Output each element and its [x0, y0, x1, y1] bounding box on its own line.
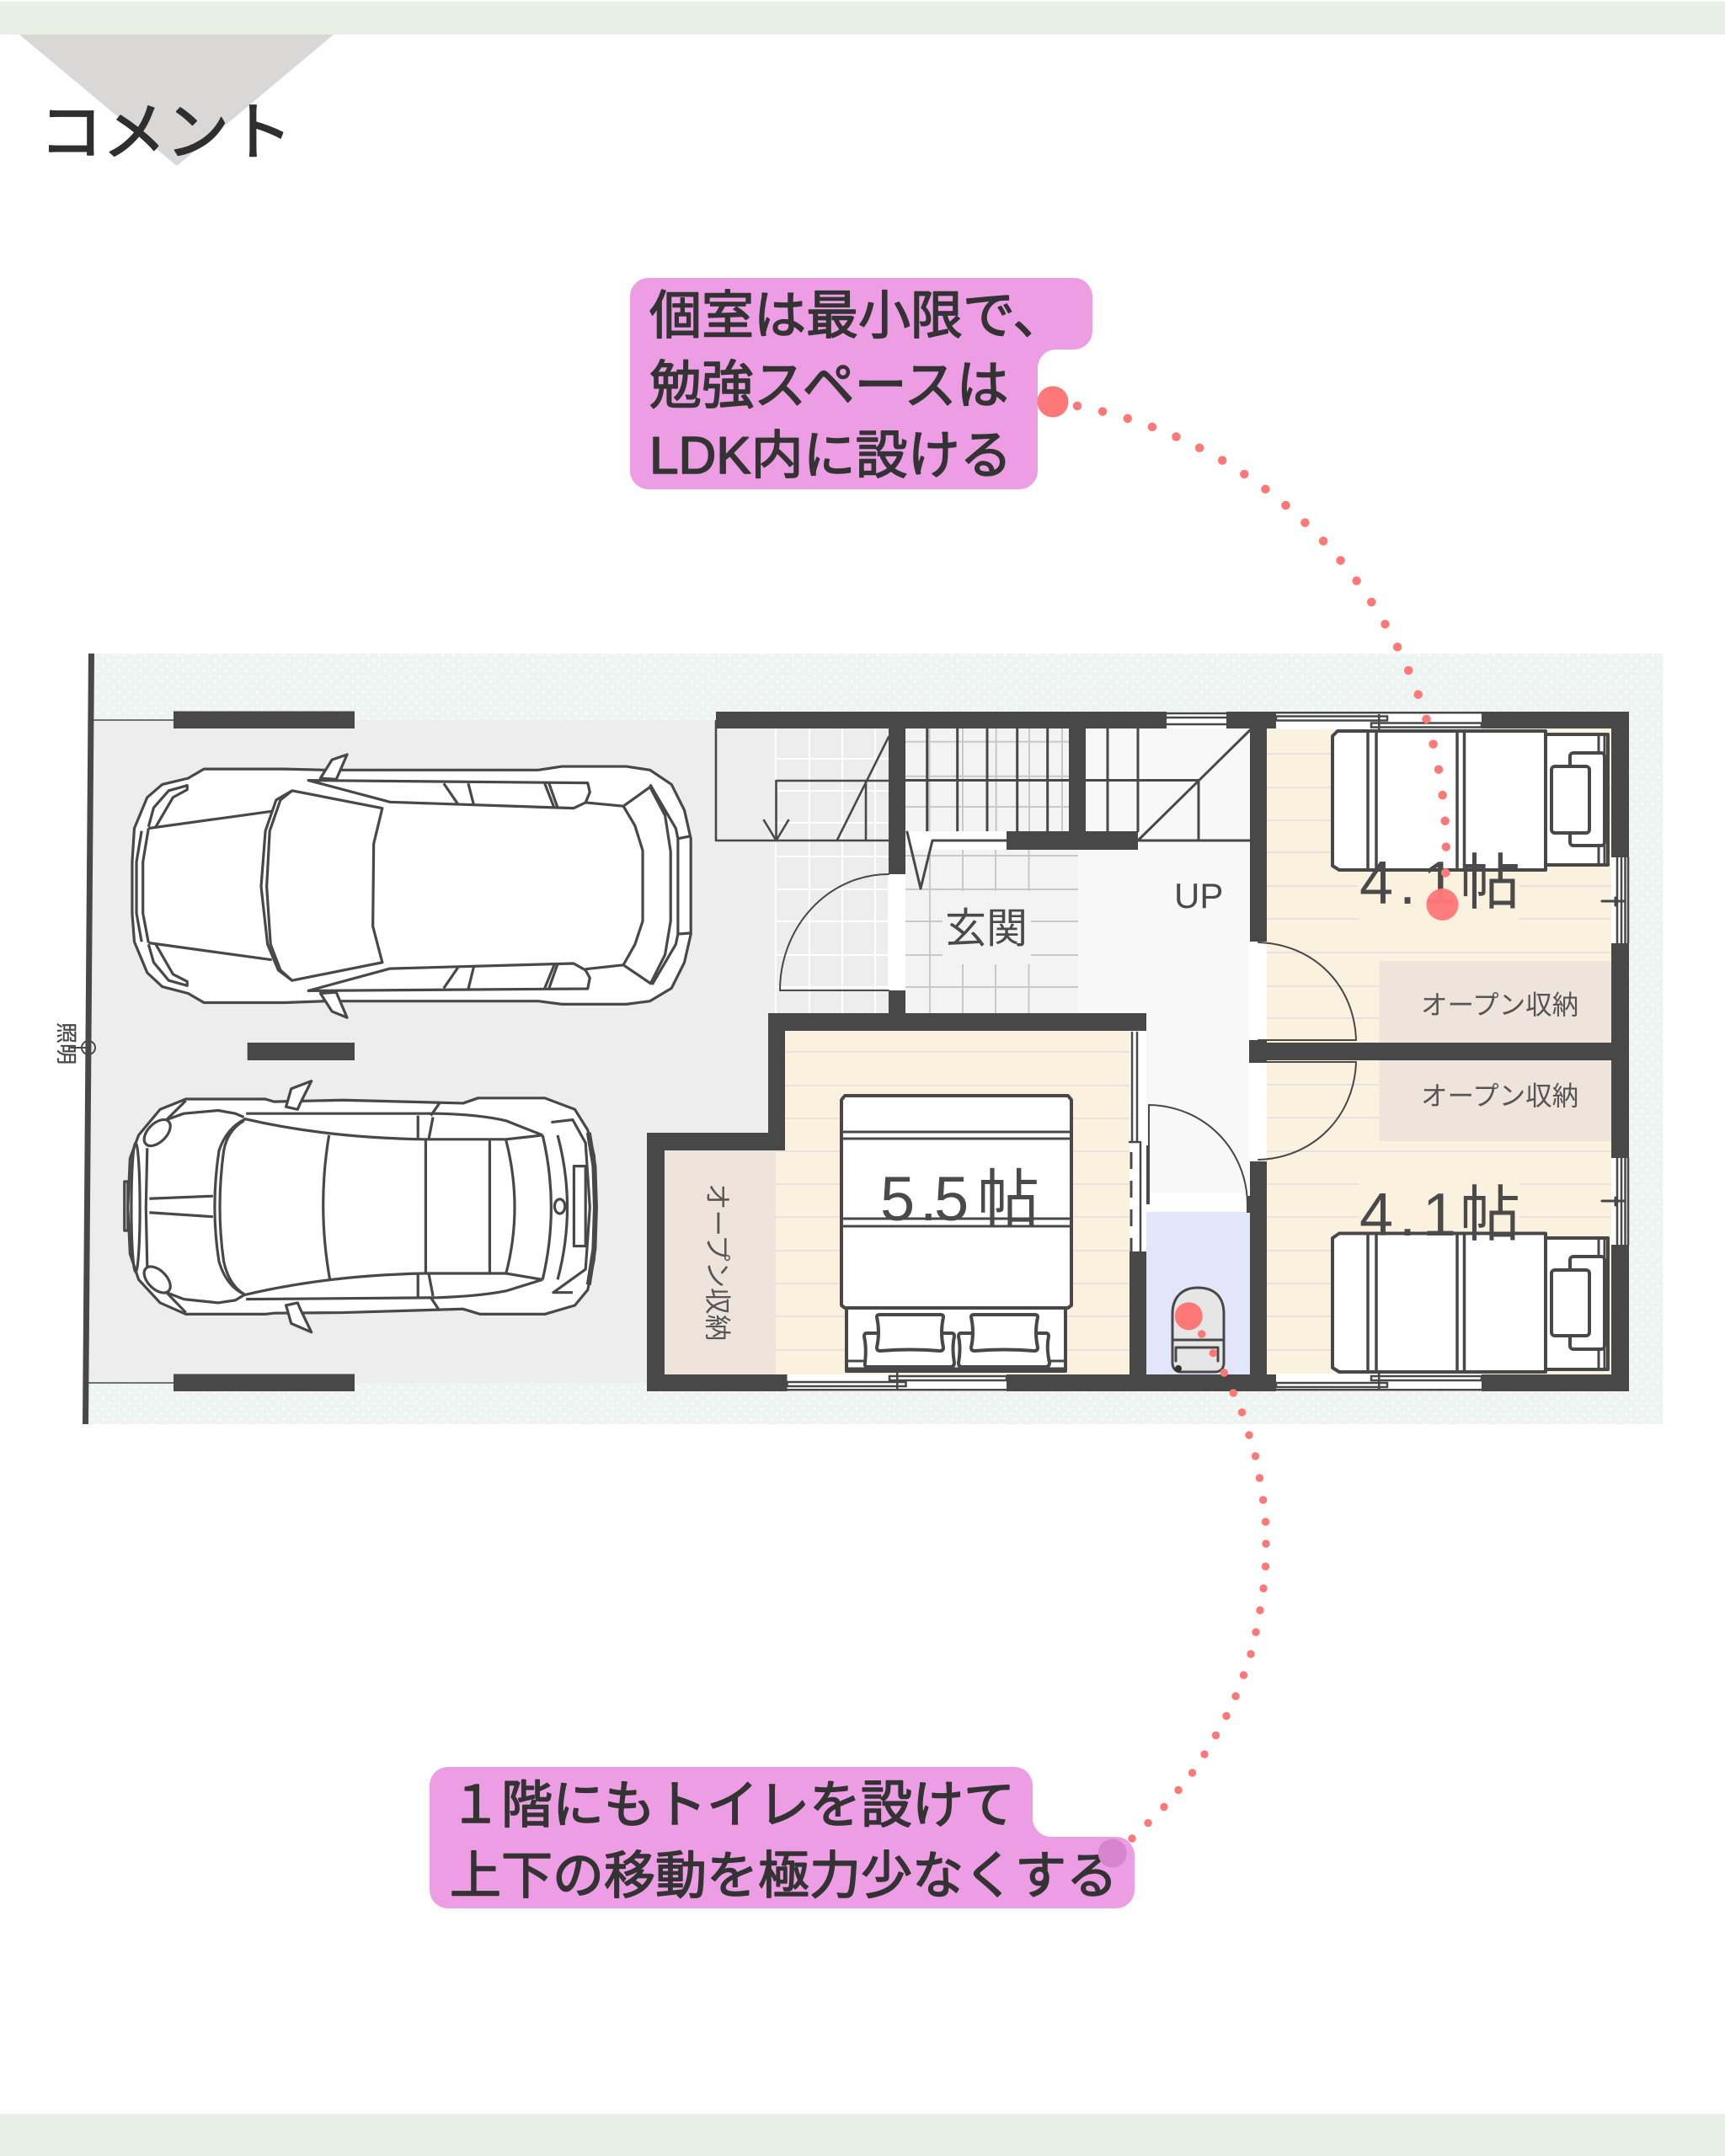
site ground	[88, 654, 1663, 1424]
lower room door	[1249, 1062, 1356, 1161]
carport wall bottom	[174, 1374, 355, 1391]
heading triangle	[19, 35, 334, 166]
toilet fixture	[1172, 1288, 1224, 1372]
hall floor	[905, 728, 1250, 1212]
label: UP: UP	[1174, 876, 1223, 915]
room floor 5.5	[776, 1031, 1130, 1374]
window of genkan	[905, 831, 1007, 889]
label: open storage lower: オープン収納	[1421, 1081, 1578, 1111]
sliding door	[1130, 1031, 1146, 1251]
callout: private rooms	[630, 278, 1092, 489]
storage 5.5 room	[665, 1150, 776, 1374]
outdoor lamp symbol	[54, 1022, 95, 1065]
callout: toilet: 上下の移動を極力少なくする	[450, 1847, 1118, 1904]
car: SUV	[132, 755, 691, 1017]
stairs right flight	[1086, 728, 1250, 841]
road boundary line	[83, 654, 94, 1424]
label: genkan: 玄関	[945, 906, 1028, 952]
callout: private rooms: 個室は最小限で、	[649, 287, 1065, 345]
storage lower room	[1380, 1060, 1611, 1141]
window lower room bottom	[1276, 1364, 1482, 1391]
window top hall	[1167, 712, 1226, 728]
outdoor lamp symbol: 照明	[54, 1022, 77, 1065]
entrance door opening	[780, 874, 905, 990]
room floor lower 4.1	[1267, 1060, 1611, 1374]
callout: toilet: １階にもトイレを設けて	[450, 1776, 1015, 1833]
window room 5.5 bottom	[787, 1364, 1007, 1391]
label: room size upper 4.1: 4.1帖	[1359, 850, 1520, 917]
walls	[647, 712, 1629, 1391]
label: open storage left: オープン収納	[702, 1183, 733, 1341]
genkan tile floor	[905, 850, 1078, 1014]
label: room size lower 4.1: 4.1帖	[1359, 1182, 1520, 1249]
carport wall middle	[248, 1043, 355, 1060]
stairs floor tint with tile lines	[905, 728, 1069, 831]
upper room door	[1249, 942, 1356, 1040]
title: コメント	[40, 97, 292, 168]
top band	[0, 2, 1725, 35]
bottom band	[0, 2114, 1725, 2156]
double bed	[841, 1096, 1071, 1371]
dotted connector: upper callout to bedroom	[1038, 386, 1459, 921]
driveway	[87, 720, 889, 1383]
window upper room top	[1276, 712, 1482, 739]
boundary thin lines	[88, 720, 174, 1383]
room floor upper 4.1	[1267, 728, 1611, 1043]
toilet door	[1146, 1105, 1250, 1213]
callout: toilet	[430, 1767, 1135, 1908]
lower single bed	[1332, 1233, 1608, 1372]
label: room size 5.5: 5.5帖	[880, 1164, 1039, 1234]
storage upper room	[1380, 961, 1611, 1043]
window lower room right	[1602, 1158, 1629, 1245]
car: compact	[125, 1081, 596, 1332]
carport wall top	[174, 711, 355, 728]
stairs left flight	[716, 721, 889, 841]
floor plan	[54, 654, 1663, 1424]
label: open storage upper: オープン収納	[1421, 990, 1578, 1020]
stairs centre flight	[905, 728, 1069, 831]
window upper room right	[1602, 857, 1629, 943]
callout: private rooms: 勉強スペースは	[649, 357, 1009, 415]
upper single bed	[1332, 731, 1608, 870]
callout: private rooms: LDK内に設ける	[649, 427, 1012, 485]
dotted connector: toilet to lower callout	[1098, 1302, 1270, 1868]
toilet floor	[1146, 1212, 1250, 1374]
entrance porch tile grid	[776, 728, 889, 1014]
